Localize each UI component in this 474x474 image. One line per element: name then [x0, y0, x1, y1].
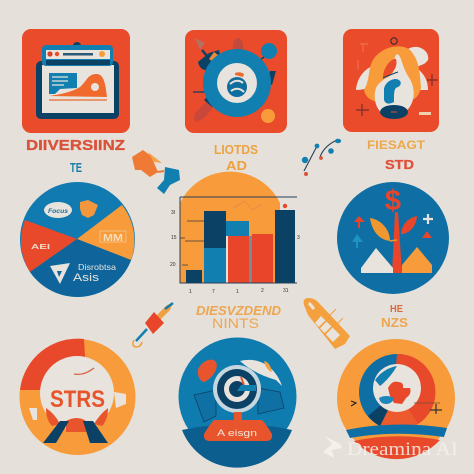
- heading: HE: HE: [390, 304, 403, 315]
- watermark: Dreamina AI: [323, 436, 458, 460]
- chart: pie chart: AEI: [31, 244, 50, 251]
- chart: bar chart on orange circle: 3I: [171, 210, 175, 216]
- chart: pie chart: [20, 182, 135, 297]
- sub-heading: AD: AD: [226, 158, 247, 173]
- sub-heading: STD: STD: [385, 157, 414, 172]
- chart: pie chart: Focus: [48, 209, 69, 215]
- panel: browser window icon: [22, 29, 130, 133]
- icon: connected dots network: [302, 139, 341, 176]
- chart: bar chart on orange circle: 31: [283, 288, 289, 294]
- panel: ring chart on orange circle: [337, 339, 455, 459]
- chart: bar chart on orange circle: 7: [212, 289, 215, 295]
- chart: bar chart on orange circle: 1: [236, 289, 239, 295]
- watermark: Dreamina AI: Dreamina AI: [347, 439, 458, 460]
- panel: gauge dial icon: [178, 338, 296, 468]
- sub-heading: NINTS: NINTS: [212, 315, 259, 331]
- heading: LIOTDS: LIOTDS: [214, 142, 258, 157]
- chart: bar chart on orange circle: 3: [297, 235, 300, 241]
- panel: tools around target icon: [185, 30, 287, 133]
- chart: bar chart on orange circle: 1: [189, 289, 192, 295]
- chart: pie chart: MM: [103, 233, 123, 244]
- heading: FIESAGT: FIESAGT: [367, 138, 426, 152]
- chart: pie chart: Disrobtsa: [78, 262, 116, 272]
- icon: orange hexagon and blue funnel: [132, 150, 180, 194]
- chart: bar chart on orange circle: 2: [261, 288, 264, 294]
- chart: bar chart on orange circle: 15: [171, 235, 177, 241]
- panel: growth plant circle icon: [337, 182, 449, 294]
- sub-heading: NZS: NZS: [381, 315, 408, 330]
- panel: STRS donut icon: [20, 339, 136, 455]
- chart: pie chart: Asis: [73, 272, 100, 284]
- heading: DIVERSIINZ: DIIVERSIINZ: [26, 137, 125, 154]
- icon: pencil tool: [133, 303, 173, 347]
- panel: gauge dial icon: A eisgn: [217, 428, 257, 438]
- heading: DIESVZDEND: DIESVZDEND: [196, 303, 282, 318]
- icon: orange tube: [304, 298, 350, 349]
- panel: growth plant circle icon: $: [385, 185, 401, 217]
- panel: abstract bulb icon: [343, 29, 439, 132]
- chart: bar chart on orange circle: 20: [170, 262, 176, 268]
- chart: bar chart on orange circle: [170, 172, 300, 295]
- panel: STRS donut icon: STRS: [50, 386, 105, 413]
- sub-heading: TE: TE: [70, 160, 82, 175]
